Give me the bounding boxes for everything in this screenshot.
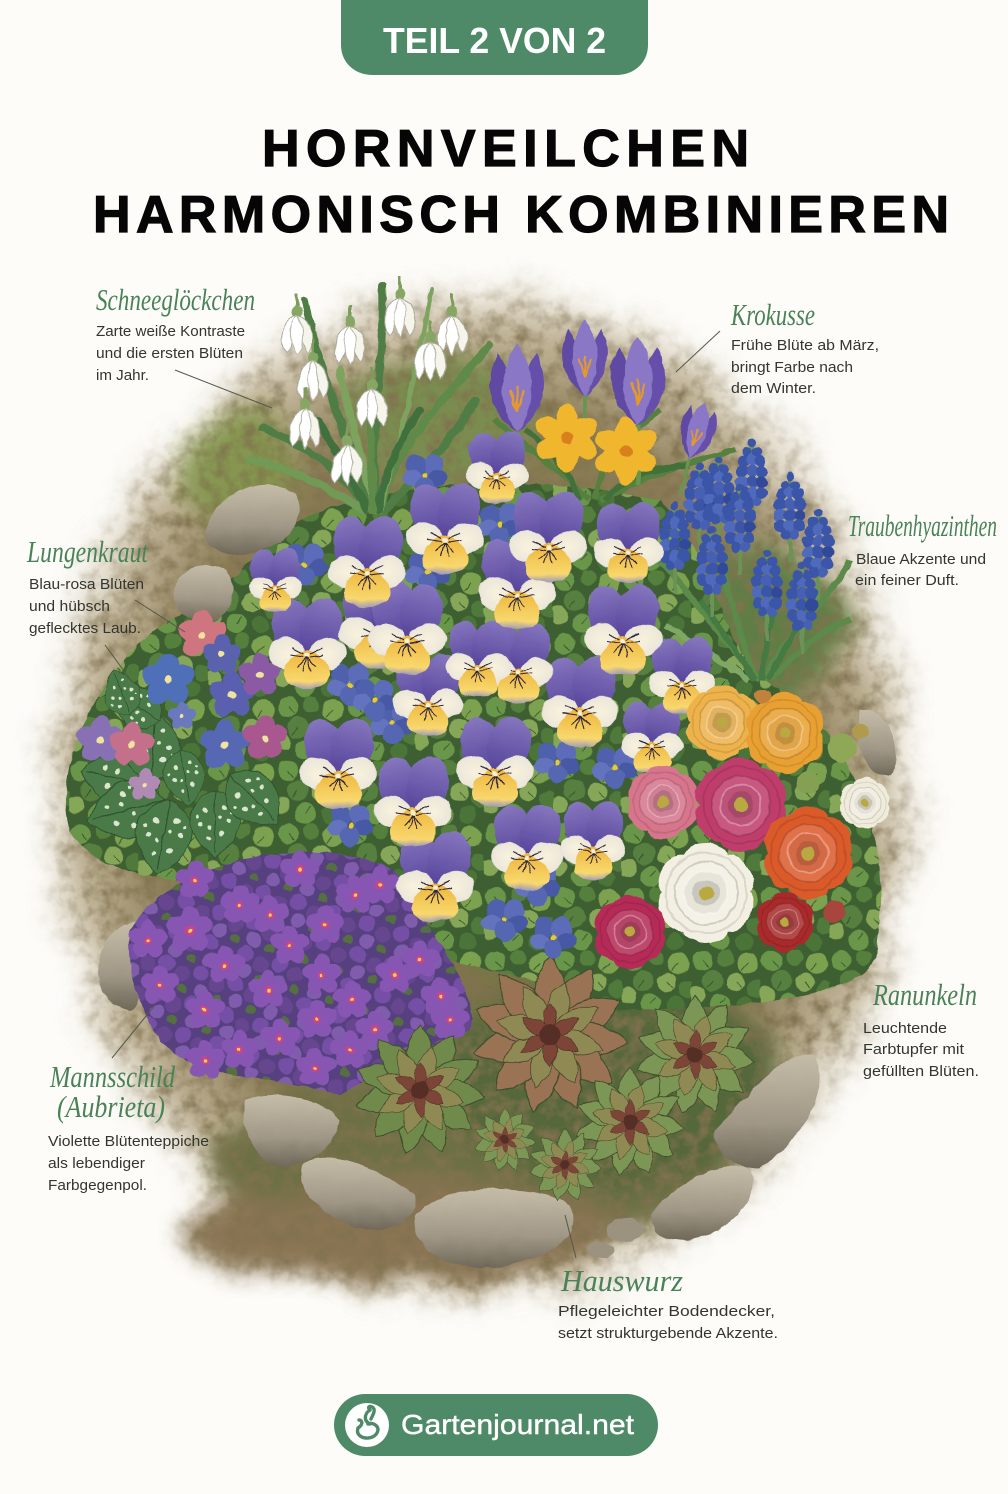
aubrieta blossoms: [127, 850, 471, 1089]
label: Hauswurz: [558, 1263, 778, 1342]
plant: Schneeglöckchen: [250, 276, 490, 510]
label: Ranunkeln: Farbtupfer mit: [863, 1041, 965, 1058]
crocus leaves: [495, 410, 735, 500]
plant: Lungenkraut: [74, 610, 296, 880]
label: Krokusse: Krokusse: [730, 297, 815, 332]
houseleek rosettes: [354, 957, 756, 1202]
snowdrop blossoms: [282, 276, 467, 485]
foliage ground cover: [66, 484, 881, 1010]
title: [93, 120, 949, 244]
label: Schneeglöckchen: [96, 282, 255, 384]
small stone bits: [586, 1218, 643, 1258]
badge: Teil 2 von 2: TEIL 2 VON 2: [383, 20, 606, 61]
label: Krokusse: Frühe Blüte ab März,: [731, 337, 879, 354]
garden bed illustration: [35, 276, 925, 1317]
icon: plant pot: [345, 1403, 389, 1447]
label: Lungenkraut: geflecktes Laub.: [29, 620, 141, 637]
label: Hauswurz: setzt strukturgebende Akzente.: [558, 1325, 778, 1342]
aubrieta carpet: [129, 852, 472, 1095]
label: Schneeglöckchen: Schneeglöckchen: [96, 282, 255, 317]
plant: Hauswurz: [354, 957, 756, 1202]
label: Mannsschild: Violette Blütenteppiche: [48, 1133, 209, 1150]
label: Traubenhyazinthen: ein feiner Duft.: [855, 572, 959, 589]
plant: Ranunkeln: [589, 685, 893, 969]
label: Mannsschild: Mannsschild: [49, 1059, 175, 1094]
label: Lungenkraut: Lungenkraut: [26, 534, 149, 569]
label: Mannsschild: [48, 1059, 209, 1194]
footer logo: Gartenjournal.net: Gartenjournal.net: [401, 1409, 634, 1440]
title: HARMONISCH KOMBINIEREN: [93, 186, 949, 244]
spotted leaves: [76, 664, 296, 880]
label: Mannsschild: Farbgegenpol.: [48, 1177, 147, 1194]
label: Lungenkraut: Blau-rosa Blüten: [29, 576, 144, 593]
leader lines: [105, 331, 720, 1258]
buttercup blossoms: [589, 685, 893, 969]
label: Traubenhyazinthen: Blaue Akzente und: [856, 551, 986, 568]
plant: Krokusse: [490, 320, 735, 500]
label: Krokusse: dem Winter.: [731, 380, 816, 397]
label: Schneeglöckchen: Zarte weiße Kontraste: [96, 323, 245, 340]
label: Traubenhyazinthen: [848, 508, 997, 589]
badge: Teil 2 von 2: [341, 0, 648, 75]
label: Krokusse: bringt Farbe nach: [731, 359, 853, 376]
label: Mannsschild: (Aubrieta): [57, 1089, 165, 1124]
label: Ranunkeln: gefüllten Blüten.: [863, 1063, 979, 1080]
label: Hauswurz: Hauswurz: [560, 1263, 683, 1298]
label: Mannsschild: als lebendiger: [48, 1155, 145, 1172]
snowdrop leaves: [250, 285, 490, 510]
label: Hauswurz: Pflegeleichter Bodendecker,: [558, 1303, 775, 1320]
plant: Traubenhyazinthen: [650, 439, 850, 680]
title: HORNVEILCHEN: [262, 120, 749, 178]
moss and earth patches: [170, 350, 845, 1280]
muscari spikes: [659, 439, 834, 653]
label: Ranunkeln: [863, 977, 979, 1080]
label: Ranunkeln: Ranunkeln: [872, 977, 977, 1012]
label: Ranunkeln: Leuchtende: [863, 1020, 947, 1037]
label: Krokusse: [730, 297, 879, 397]
label: Schneeglöckchen: im Jahr.: [96, 367, 149, 384]
crocus blossoms: [490, 320, 722, 500]
large pansies: [245, 427, 718, 922]
small violas: [282, 454, 638, 959]
plant: Hornveilchen: [245, 427, 718, 959]
rocks: [98, 485, 896, 1268]
lungwort blossoms: [74, 610, 290, 802]
soil base: [35, 277, 925, 1317]
muscari leaves: [650, 550, 850, 680]
label: Schneeglöckchen: und die ersten Blüten: [96, 345, 243, 362]
buds: [755, 688, 868, 922]
label: Lungenkraut: [26, 534, 149, 637]
label: Lungenkraut: und hübsch: [29, 598, 110, 615]
plant: Mannsschild: [127, 850, 472, 1095]
footer logo: Gartenjournal.net: [334, 1394, 658, 1456]
